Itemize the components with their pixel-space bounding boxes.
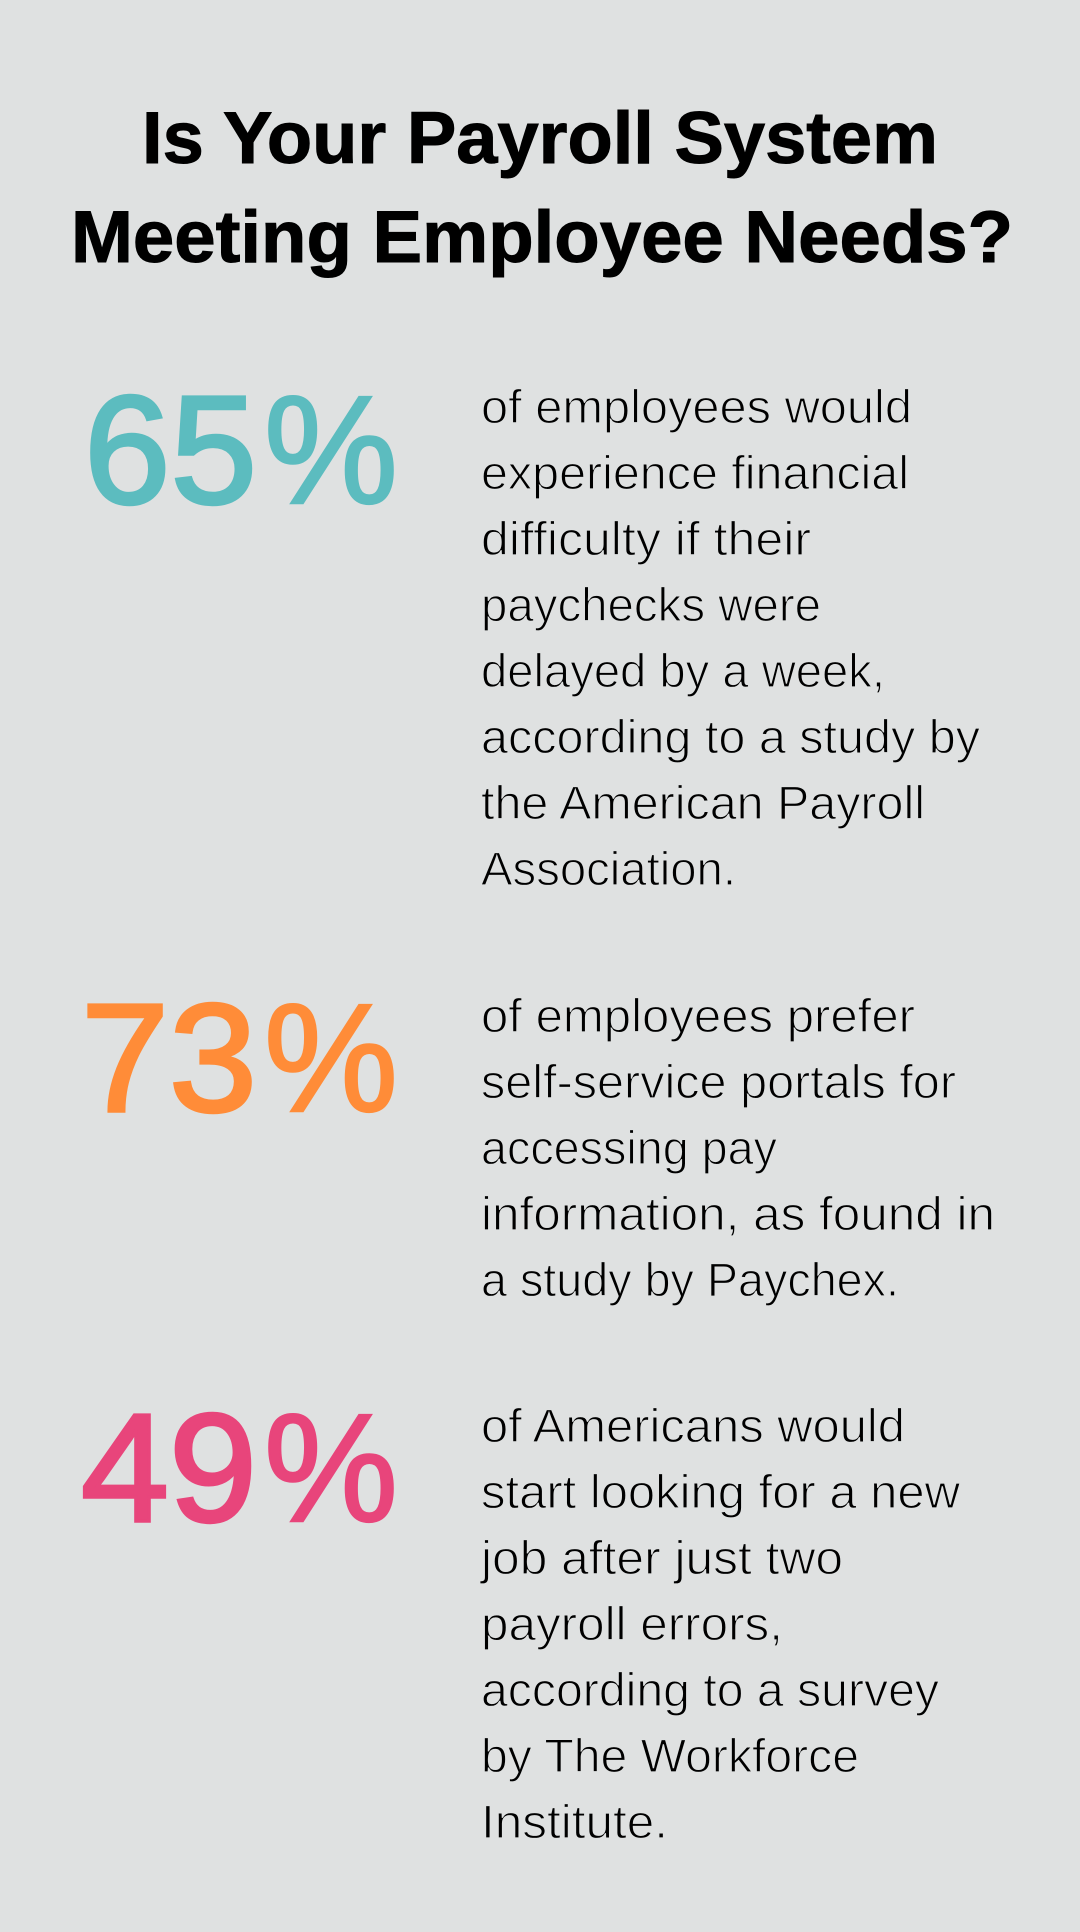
number: 65% [84,364,398,536]
text block: 49% description: job after just two [479,1531,843,1584]
text block: 49% description [479,1399,961,1848]
text block: 65% description: according to a study by [481,710,981,763]
text block: 73% description: self-service portals for [481,1055,956,1108]
title: Meeting Employee Needs? [71,197,1013,278]
text block: 65% description: Association. [481,842,736,895]
text block: 49% description: Institute. [481,1795,668,1848]
number: 73%: % [264,972,398,1144]
title [71,98,1013,278]
text block: 65% description: of employees would [481,380,912,433]
text block: 73% description: of employees prefer [481,989,915,1042]
number: 49%: % [264,1382,398,1554]
text block: 49% description: of Americans would [481,1399,905,1452]
text block: 49% description: according to a survey [481,1663,940,1716]
panel: 73% statistic [81,972,995,1306]
title: Is Your Payroll System [142,98,938,179]
number: 73% [81,972,398,1144]
text block: 49% description: by The Workforce [481,1729,859,1782]
text block: 49% description: payroll errors, [481,1597,783,1650]
number: 65%: 65 [84,364,257,536]
text block: 65% description: experience financial [481,446,909,499]
number: 73%: 73 [81,972,257,1144]
text block: 73% description: accessing pay [481,1121,777,1174]
text block: 65% description [481,380,981,895]
panel: 65% statistic [84,364,981,895]
text block: 73% description: information, as found in [481,1187,995,1240]
text block: 65% description: the American Payroll [481,776,925,829]
number: 65%: % [264,364,398,536]
text block: 73% description [481,989,995,1306]
number: 49% [81,1382,398,1554]
panel: 49% statistic [81,1382,961,1848]
text block: 65% description: paychecks were [481,578,821,631]
text block: 49% description: start looking for a new [481,1465,961,1518]
text block: 73% description: a study by Paychex. [481,1253,899,1306]
number: 49%: 49 [81,1382,257,1554]
text block: 65% description: difficulty if their [481,512,811,565]
text block: 65% description: delayed by a week, [481,644,885,697]
